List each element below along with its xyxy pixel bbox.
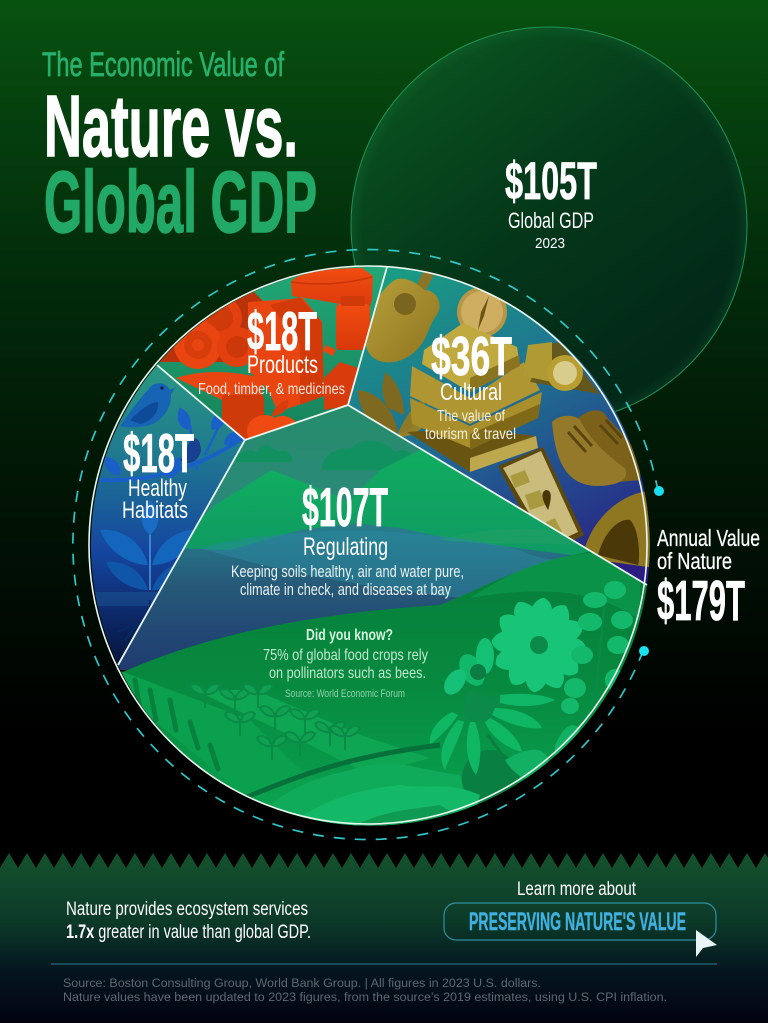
label: products (198, 300, 345, 398)
title: The Economic Value of (42, 46, 284, 84)
label: healthy habitats: Habitats (122, 497, 188, 524)
pie outline (89, 266, 647, 824)
global GDP label: $105T (505, 152, 597, 211)
icon: log pile (160, 292, 262, 369)
crop rows (118, 670, 440, 800)
icon: clouds (236, 441, 414, 470)
panel: cultural segment (349, 268, 650, 584)
icon: lupin plant (561, 581, 633, 714)
source note (63, 978, 667, 1004)
callout: did you know: Source: World Economic Forum (285, 688, 405, 700)
icon: tent (585, 492, 650, 568)
source note: Source: Boston Consulting Group, World Bank Group. | All figures in 2023 U.S. dollars. (63, 978, 541, 990)
footer statement (66, 899, 311, 943)
dashed outer ring (73, 250, 658, 840)
label: regulating: climate in check, and diseases at bay (240, 580, 451, 599)
meadow (105, 550, 650, 840)
icon: apple (247, 400, 296, 438)
leaves bottom right (505, 725, 580, 780)
label: regulating: $107T (302, 476, 388, 538)
learn more heading: Learn more about (517, 879, 637, 900)
label: products: $18T (247, 300, 317, 362)
label: healthy habitats (122, 422, 194, 524)
title (42, 46, 317, 251)
icon: lotus plant (358, 372, 428, 438)
icon: camera (523, 342, 600, 394)
rolling waves (270, 765, 480, 826)
call-to-action button (444, 903, 716, 940)
annual value of nature label: of Nature (657, 548, 732, 574)
label: regulating: Keeping soils healthy, air and water pure, (231, 562, 464, 581)
icon: cheese (290, 268, 373, 307)
label: regulating (231, 476, 464, 599)
icon: daisy flower (490, 595, 588, 695)
label: cultural: The value of (437, 408, 505, 425)
label: products: Food, timber, & medicines (198, 381, 345, 398)
global GDP circle (351, 27, 747, 423)
dark ball (462, 750, 518, 806)
source note: Nature values have been updated to 2023 figures, from the source's 2019 estimates, using U.S. CPI inflation. (63, 992, 667, 1004)
icon: cursor arrow (696, 930, 717, 957)
left ridge (470, 552, 640, 620)
icon: stack of books (407, 323, 542, 472)
icon: milk carton (248, 297, 324, 412)
title: Global GDP (44, 154, 317, 251)
icon: medicine bottle (323, 296, 370, 356)
panel: products segment (157, 266, 386, 439)
icon: blue plant (100, 500, 200, 590)
global GDP label: Global GDP (508, 208, 594, 233)
segment dividers (118, 267, 647, 665)
callout: did you know: Did you know? (306, 627, 393, 644)
footer divider (51, 963, 717, 965)
annual value of nature label (657, 525, 760, 633)
river (200, 531, 551, 598)
mountains (185, 450, 590, 555)
footer statement: 1.7x greater in value than global GDP. (66, 922, 311, 943)
icon: branch with leaves (100, 405, 248, 481)
footer panel (0, 853, 768, 1023)
icon: map on phone (498, 447, 584, 540)
label: cultural: Cultural (440, 379, 502, 406)
global GDP label (505, 152, 597, 252)
icon: wood plank and greens (176, 362, 358, 445)
icon: bluebird (120, 383, 176, 427)
icon: hiking boots (552, 410, 640, 486)
label: cultural: tourism & travel (425, 426, 516, 443)
label: healthy habitats: $18T (123, 422, 194, 484)
icon: compass (457, 287, 507, 337)
global GDP label: 2023 (535, 235, 565, 252)
panel: regulating segment (105, 400, 655, 840)
callout: did you know (263, 627, 428, 700)
title: Nature vs. (44, 78, 298, 175)
label: cultural (425, 325, 516, 443)
callout: did you know: 75% of global food crops rely (263, 647, 428, 664)
annual value marker dots (639, 486, 664, 656)
panel: healthy habitats segment (90, 365, 244, 664)
water and roots (95, 592, 158, 640)
label: regulating: Regulating (303, 533, 388, 561)
label: healthy habitats: Healthy (128, 475, 187, 502)
callout: did you know: on pollinators such as bees. (269, 665, 426, 682)
label: cultural: $36T (431, 325, 512, 387)
footer statement: Nature provides ecosystem services (66, 899, 308, 920)
icon: guitar (365, 270, 440, 362)
label: products: Products (247, 351, 318, 379)
icon: coneflower (430, 690, 555, 780)
icon: bee (444, 638, 494, 695)
